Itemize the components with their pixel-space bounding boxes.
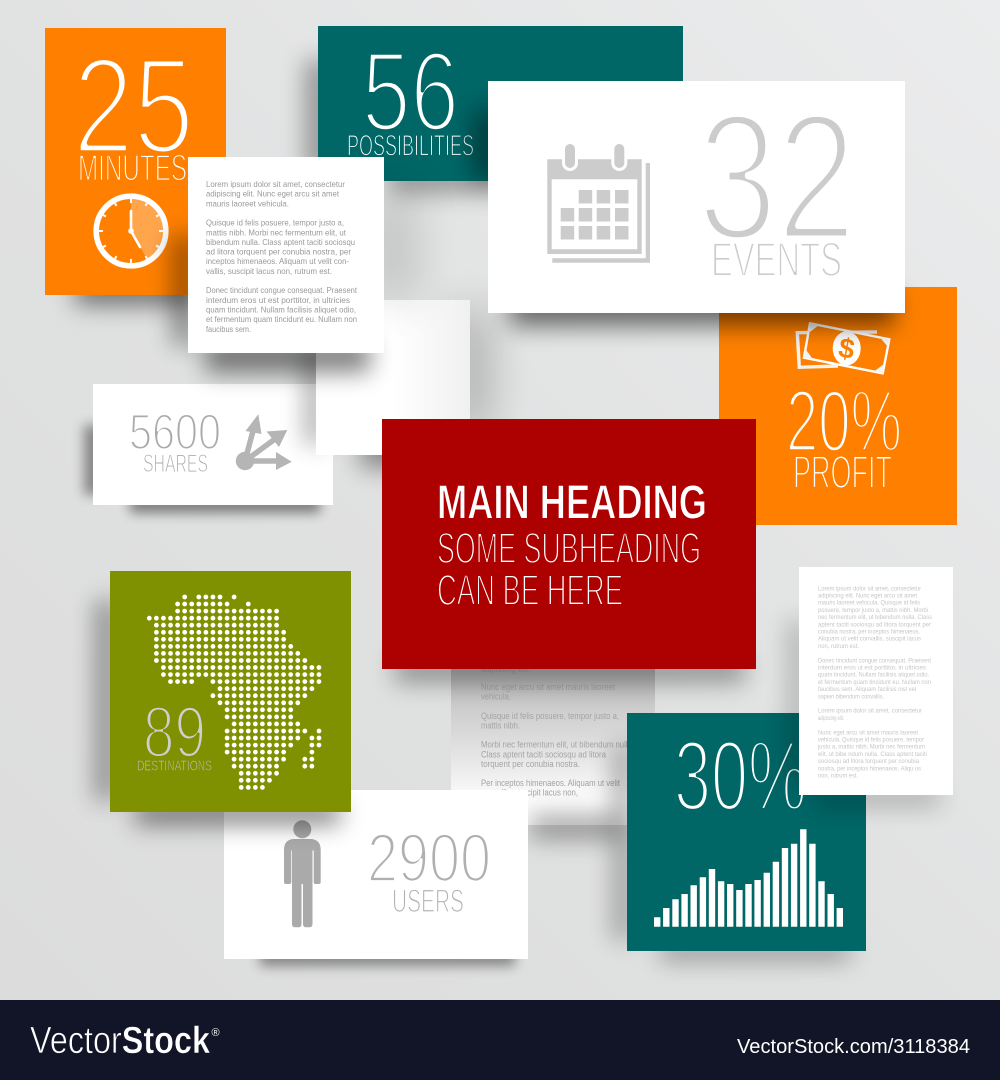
text: small paragraphs: conubia nostra, per inceptos himenaeos. [818, 628, 920, 636]
text: small paragraphs: et fermentum quam tincidunt eu. Nullam non [818, 679, 931, 686]
footer bar [0, 1000, 1000, 1080]
text: lorem paragraphs: faucibus sem. [206, 324, 251, 334]
text: lorem paragraphs: mauris laoreet vehicula. [206, 198, 289, 208]
icon: clock [96, 196, 166, 266]
text: lorem paragraphs: et fermentum quam tincidunt eu. Nullam non [206, 314, 357, 324]
icon: calendar [547, 142, 650, 263]
text: faded paragraphs: adipiscing elit. [481, 664, 530, 674]
panel: 20% profit [719, 287, 957, 525]
panel: 30% chart [627, 713, 866, 951]
stat: 20%: 20% [786, 373, 902, 470]
stat: 5600: 5600 [129, 404, 221, 460]
text: faded paragraphs: torquent per conubia nostra. [481, 759, 580, 769]
text: small paragraphs: Aliquam ut velit convallis, suscipit lacus [818, 636, 922, 643]
text: lorem paragraphs: Donec tincidunt congue consequat. Praesent [206, 285, 358, 295]
text: faded paragraphs: Class aptent taciti sociosqu ad litora [481, 749, 606, 759]
text: small paragraphs: quam tincidunt. Nullam facilisis aliquet odio, [818, 672, 929, 679]
icon label: dollar sign: $ [836, 332, 857, 365]
subheading line 2: CAN BE HERE [437, 566, 623, 615]
text: small paragraphs: vehicula. Quisque id felis posuere, tempor [818, 736, 925, 744]
text: lorem paragraphs: interdum eros ut est porttitor, in ultricies [206, 295, 350, 305]
text: faded paragraphs: vehicula. [481, 692, 511, 702]
text: faded paragraphs: Quisque id felis posuere, tempor justo a, [481, 711, 619, 721]
text: small paragraphs: aptent taciti sociosqu ad litora torquent per [818, 621, 932, 628]
text: small paragraphs: adipiscing elit. [818, 715, 844, 722]
text: small paragraphs: mauris laoreet vehicula. Quisque id felis [818, 600, 921, 607]
map: dotted africa [149, 597, 319, 787]
image id: VectorStock.com/3118384 [737, 1036, 970, 1058]
icon: person [284, 820, 321, 927]
text: small paragraphs: non, rutrum est. [818, 643, 859, 650]
text: small paragraphs: justo a, mattis nibh. Morbi nec fermentum [817, 744, 925, 751]
stat: 89: 89 [143, 693, 206, 773]
text: lorem paragraphs: quam tincidunt. Nullam facilisis aliquet odio, [206, 304, 356, 314]
panel: 5600 shares [93, 384, 333, 505]
stat: 2900: 2900 [367, 820, 491, 896]
text: small paragraphs [817, 585, 933, 780]
subheading line 1: SOME SUBHEADING [437, 524, 701, 573]
panel: 32 events [488, 77, 905, 313]
panel: main heading [382, 419, 756, 669]
text: faded paragraphs: convallis, suscipit lacus non, [481, 788, 578, 798]
text: lorem paragraphs: Quisque id felis posuere, tempor justo a, [206, 218, 344, 228]
stat: 56: 56 [362, 28, 459, 154]
label: destinations: DESTINATIONS [137, 757, 212, 774]
text: faded paragraphs: Nunc eget arcu sit amet mauris laoreet [481, 682, 615, 692]
text: small paragraphs: posuere, tempor justo a, mattis nibh. Morbi [818, 607, 928, 614]
text: lorem paragraphs: mattis nibh. Morbi nec fermentum elit, ut [206, 227, 347, 237]
text: lorem paragraphs: inceptos himenaeos. Aliquam ut velit con- [206, 256, 349, 266]
text: small paragraphs: elit, ut bibe ndum nulla. Class aptent taciti [818, 751, 927, 758]
panel: text block behind heading [451, 664, 655, 825]
panel: text block right [799, 567, 953, 795]
text: small paragraphs: nostra, per inceptos himenaeos. Aliqu us [818, 765, 922, 772]
panel: 89 destinations [110, 571, 351, 812]
text: faded paragraphs: Per inceptos himenaeos. Aliquam ut velit [481, 778, 620, 788]
panel: 2900 users [224, 790, 528, 959]
bar chart [657, 829, 840, 927]
label: profit: PROFIT [793, 446, 892, 498]
text: small paragraphs: Lorem ipsum dolor sit amet, consectetur [818, 585, 922, 592]
label: minutes: MINUTES [78, 148, 187, 188]
text: small paragraphs: faucibus sem. Aliquam facilisis nisl vel [818, 686, 916, 693]
text: faded paragraphs: mattis nibh. [481, 721, 520, 731]
label: possibilities: POSSIBILITIES [347, 130, 474, 163]
text: small paragraphs: sapien bibendum convallis. [818, 693, 884, 700]
panel: blank card [316, 300, 470, 455]
text: lorem paragraphs: adipiscing elit. Nunc eget arcu sit amet [206, 189, 340, 199]
heading: MAIN HEADING [437, 476, 707, 529]
text: small paragraphs: interdum eros ut est porttitor, in ultricies [818, 664, 927, 672]
stat: 32: 32 [698, 77, 856, 278]
text: small paragraphs: Nunc eget arcu sit amet mauris laoreet [818, 729, 918, 736]
text: lorem paragraphs [206, 179, 358, 334]
label: users: USERS [392, 883, 464, 919]
text: small paragraphs: sociosqu ad litora torquent per conubia [818, 758, 919, 765]
icon: banknotes [797, 323, 889, 373]
logo: VectorStock [30, 1020, 211, 1062]
text: faded paragraphs [481, 664, 634, 798]
text: small paragraphs: adipiscing elit. Nunc eget arcu sit amet [818, 592, 917, 600]
text: lorem paragraphs: ad litora torquent per conubia nostra, per [206, 247, 351, 257]
panel: 25 minutes [45, 28, 226, 295]
label: shares: SHARES [143, 450, 208, 478]
logo registered mark: ® [211, 1027, 220, 1039]
icon: share arrows [236, 414, 292, 470]
text: small paragraphs: Donec tincidunt congue consequat. Praesent [818, 657, 931, 664]
text: lorem paragraphs: vallis, suscipit lacus non, rutrum est. [206, 266, 332, 276]
text: lorem paragraphs: bibendum nulla. Class aptent taciti sociosqu [206, 237, 355, 247]
stat: 25: 25 [73, 30, 194, 183]
text: small paragraphs: nec fermentum elit, ut bibendum nulla. Class [818, 614, 933, 621]
text: small paragraphs: Lorem ipsum dolor sit amet, consectetur [818, 708, 923, 715]
label: events: EVENTS [711, 234, 842, 287]
text: lorem paragraphs: Lorem ipsum dolor sit amet, consectetur [206, 179, 345, 189]
stat: 30%: 30% [674, 720, 807, 831]
text: faded paragraphs: Morbi nec fermentum elit, ut bibendum nulla. [481, 740, 634, 750]
text: small paragraphs: non, rutrum est. [818, 772, 858, 780]
panel: text block top [188, 157, 384, 353]
panel: 56 possibilities [318, 26, 683, 181]
